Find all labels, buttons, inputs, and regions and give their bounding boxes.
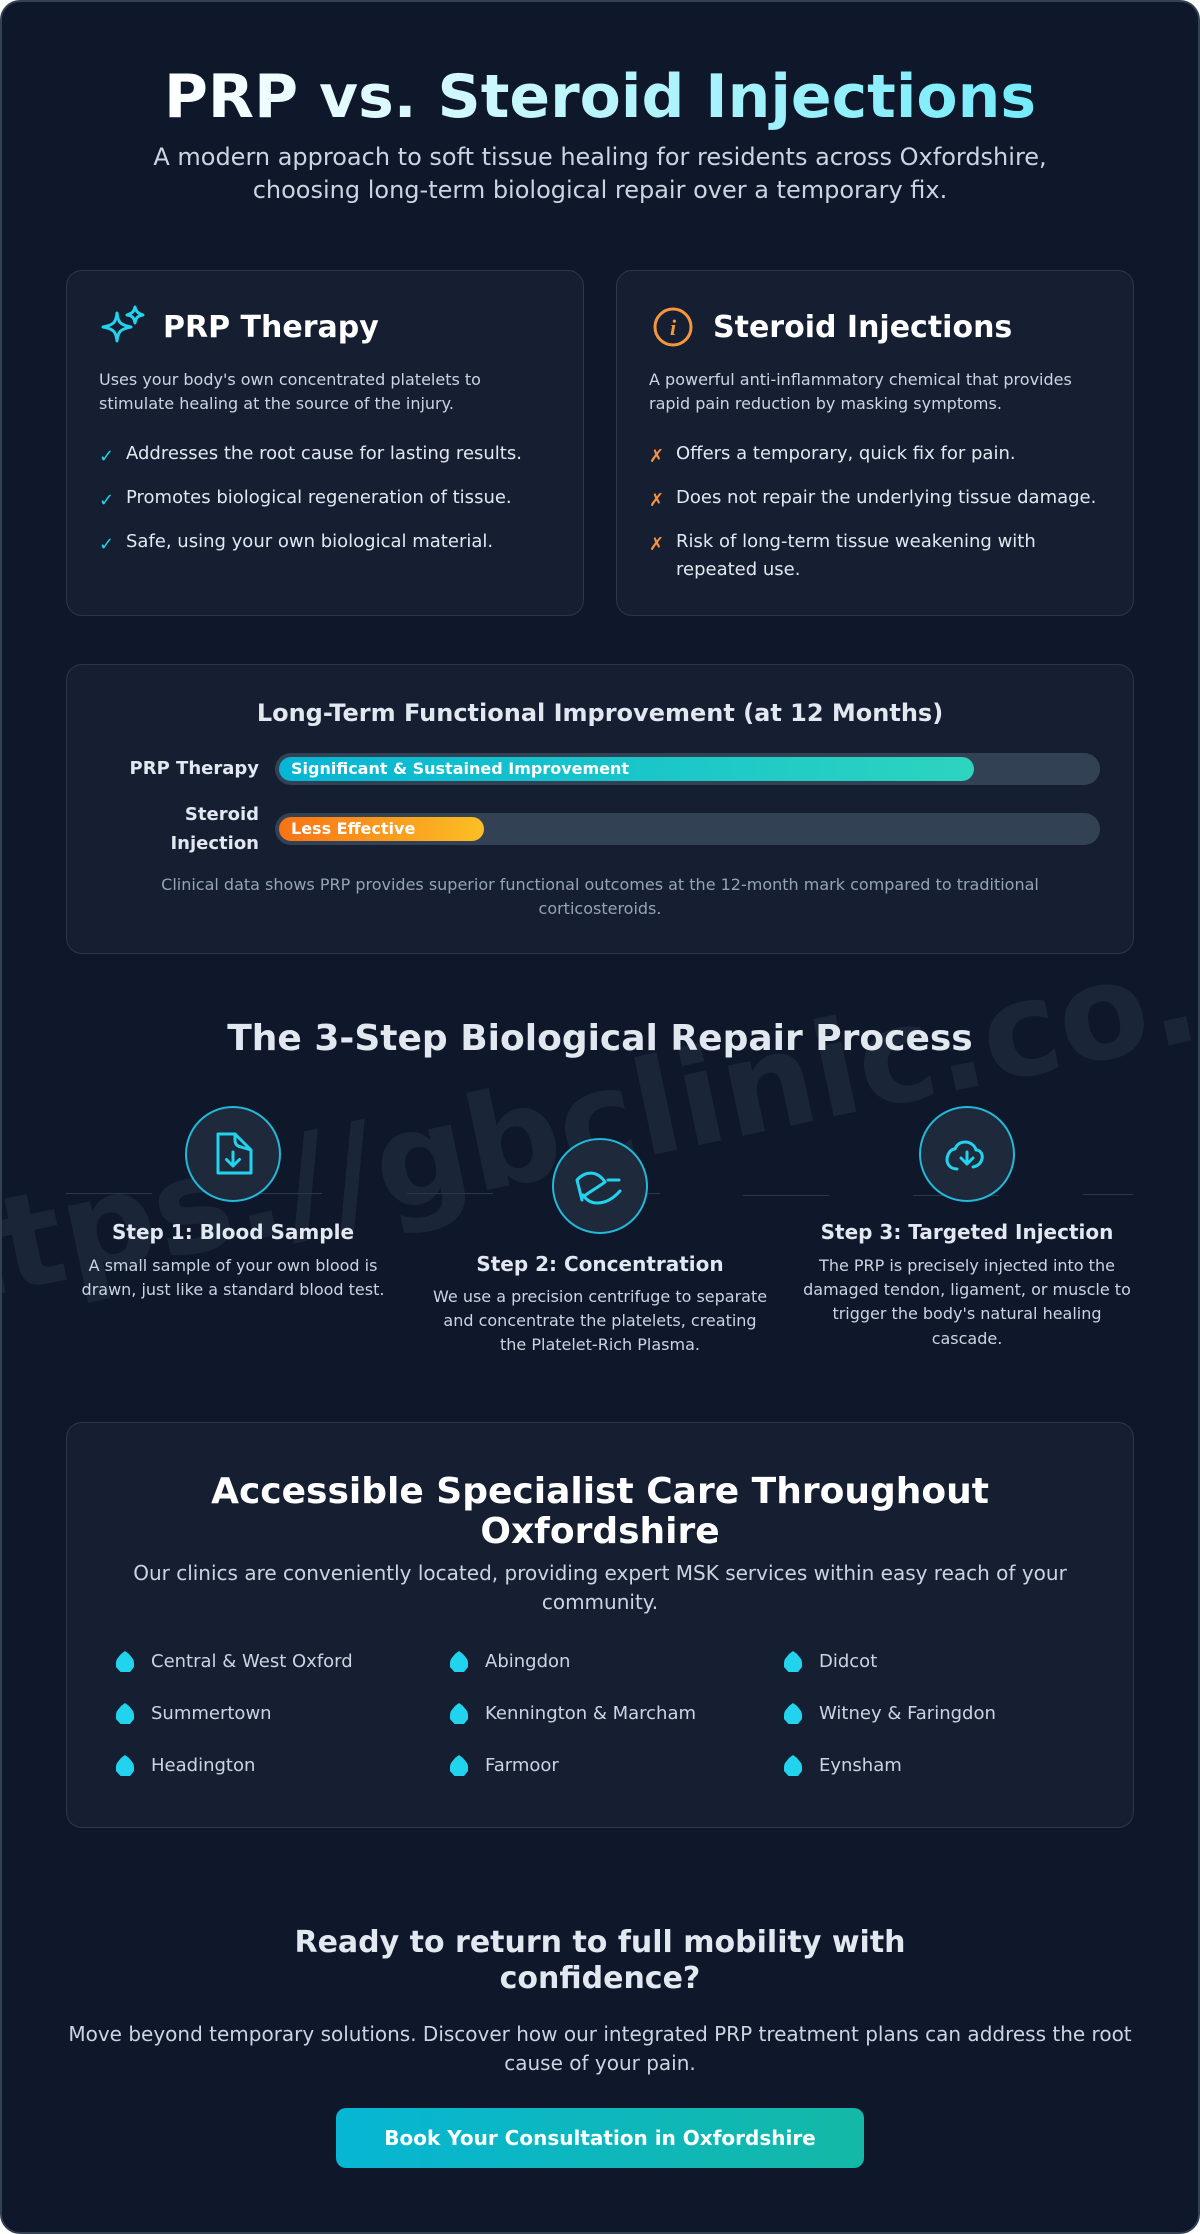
bar fill: Less Effective [291,819,415,838]
description: rapid pain reduction by masking symptoms. [649,394,1002,413]
heading: steroid injections: Steroid Injections [713,310,1012,345]
subtitle: A modern approach to soft tissue healing for residents across Oxfordshire, [153,143,1047,171]
drawback 2: Does not repair the underlying tissue damage. [676,487,1096,508]
description [649,370,1072,413]
drawback 3 [676,531,1036,580]
benefit list [99,443,522,555]
location: Eynsham: Eynsham [819,1755,902,1776]
step 3 [803,1106,1131,1348]
bar track [275,753,1100,785]
step 1 [82,1106,384,1299]
CTA text: cause of your pain. [504,2051,696,2075]
location grid [116,1651,996,1776]
step title: Step 2: Concentration [476,1252,724,1276]
chart note: corticosteroids. [539,899,661,918]
benefit 3: Safe, using your own biological material. [126,531,493,552]
icon: cloud download [919,1106,1015,1202]
drawback 1: Offers a temporary, quick fix for pain. [676,443,1016,464]
CTA heading [294,1925,906,1996]
location: Didcot: Didcot [819,1651,877,1672]
step description: We use a precision centrifuge to separate [433,1287,767,1306]
CTA button: Book Your Consultation in Oxfordshire [384,2126,816,2150]
location: Didcot [784,1651,877,1672]
bar label [170,804,259,854]
icon: sparkles [102,306,144,342]
panel: bar chart [66,664,1134,954]
CTA text: Move beyond temporary solutions. Discover how our integrated PRP treatment plans can address the root [68,2022,1132,2046]
location: Kennington & Marcham: Kennington & Marcham [485,1703,696,1724]
description: A powerful anti-inflammatory chemical that provides [649,370,1072,389]
CTA heading: confidence? [500,1961,700,1996]
step description: The PRP is precisely injected into the [819,1256,1115,1275]
cross mark: ✗ [649,446,664,467]
heading: Accessible Specialist Care Throughout [211,1471,989,1512]
subtitle: choosing long-term biological repair over a temporary fix. [253,176,947,204]
drawback 3: Risk of long-term tissue weakening with [676,531,1036,552]
benefit 2: Promotes biological regeneration of tissue. [126,487,512,508]
step description [803,1256,1131,1348]
check mark: ✓ [99,490,114,511]
location: Witney & Faringdon: Witney & Faringdon [819,1703,996,1724]
step title: Step 1: Blood Sample [112,1220,354,1244]
drawback list [649,443,1096,580]
CTA button [336,2108,864,2168]
location: Farmoor [450,1755,559,1776]
bar row: PRP therapy [130,753,1100,785]
bar row: steroid injection [170,804,1100,854]
intro text: Our clinics are conveniently located, providing expert MSK services within easy reach of your [133,1561,1067,1585]
benefit 1: Addresses the root cause for lasting results. [126,443,522,464]
step description [433,1287,767,1354]
bar fill: Significant & Sustained Improvement [291,759,629,778]
check mark: ✓ [99,534,114,555]
location: Farmoor: Farmoor [485,1755,559,1776]
location: Abingdon: Abingdon [485,1651,570,1672]
location: Headington: Headington [151,1755,255,1776]
panel: PRP therapy [66,270,584,616]
drawback 3: repeated use. [676,559,800,580]
icon: file download [185,1106,281,1202]
intro text [133,1561,1067,1614]
bar label: Steroid [185,804,259,825]
step description: A small sample of your own blood is [89,1256,377,1275]
step description: damaged tendon, ligament, or muscle to [803,1280,1131,1299]
icon: info [654,308,692,346]
CTA heading: Ready to return to full mobility with [294,1925,906,1960]
bar fill [279,817,484,841]
step description: and concentrate the platelets, creating [443,1311,757,1330]
description: Uses your body's own concentrated platelets to [99,370,481,389]
heading [211,1471,989,1552]
description: stimulate healing at the source of the injury. [99,394,454,413]
cross mark: ✗ [649,490,664,511]
icon: leaf [552,1138,648,1234]
heading: Oxfordshire [480,1511,720,1552]
step description: cascade. [932,1329,1002,1348]
chart note: Clinical data shows PRP provides superior functional outcomes at the 12-month mark compared to traditional [161,875,1039,894]
icon: info: i [670,315,677,340]
panel: steroid injections [616,270,1134,616]
bar label: Injection [170,833,259,854]
title: PRP vs. Steroid Injections [164,62,1036,132]
bar track [275,813,1100,845]
step description: the Platelet-Rich Plasma. [500,1335,700,1354]
subtitle [153,143,1047,204]
bar label: PRP Therapy [130,758,259,779]
bar fill [279,757,974,781]
panel: locations [66,1422,1134,1828]
check mark: ✓ [99,446,114,467]
intro text: community. [542,1590,658,1614]
location: Central & West Oxford: Central & West Oxford [151,1651,353,1672]
cross mark: ✗ [649,534,664,555]
step title: Step 3: Targeted Injection [821,1220,1113,1244]
chart note [161,875,1039,918]
heading: PRP therapy: PRP Therapy [163,310,379,345]
step 2 [433,1138,767,1354]
chart title: Long-Term Functional Improvement (at 12 Months) [257,699,943,727]
step description: drawn, just like a standard blood test. [82,1280,384,1299]
step description: trigger the body's natural healing [832,1304,1102,1323]
location: Summertown: Summertown [151,1703,272,1724]
step description [82,1256,384,1299]
section heading: process: The 3-Step Biological Repair Process [227,1018,973,1059]
description [99,370,481,413]
CTA text [68,2022,1132,2075]
